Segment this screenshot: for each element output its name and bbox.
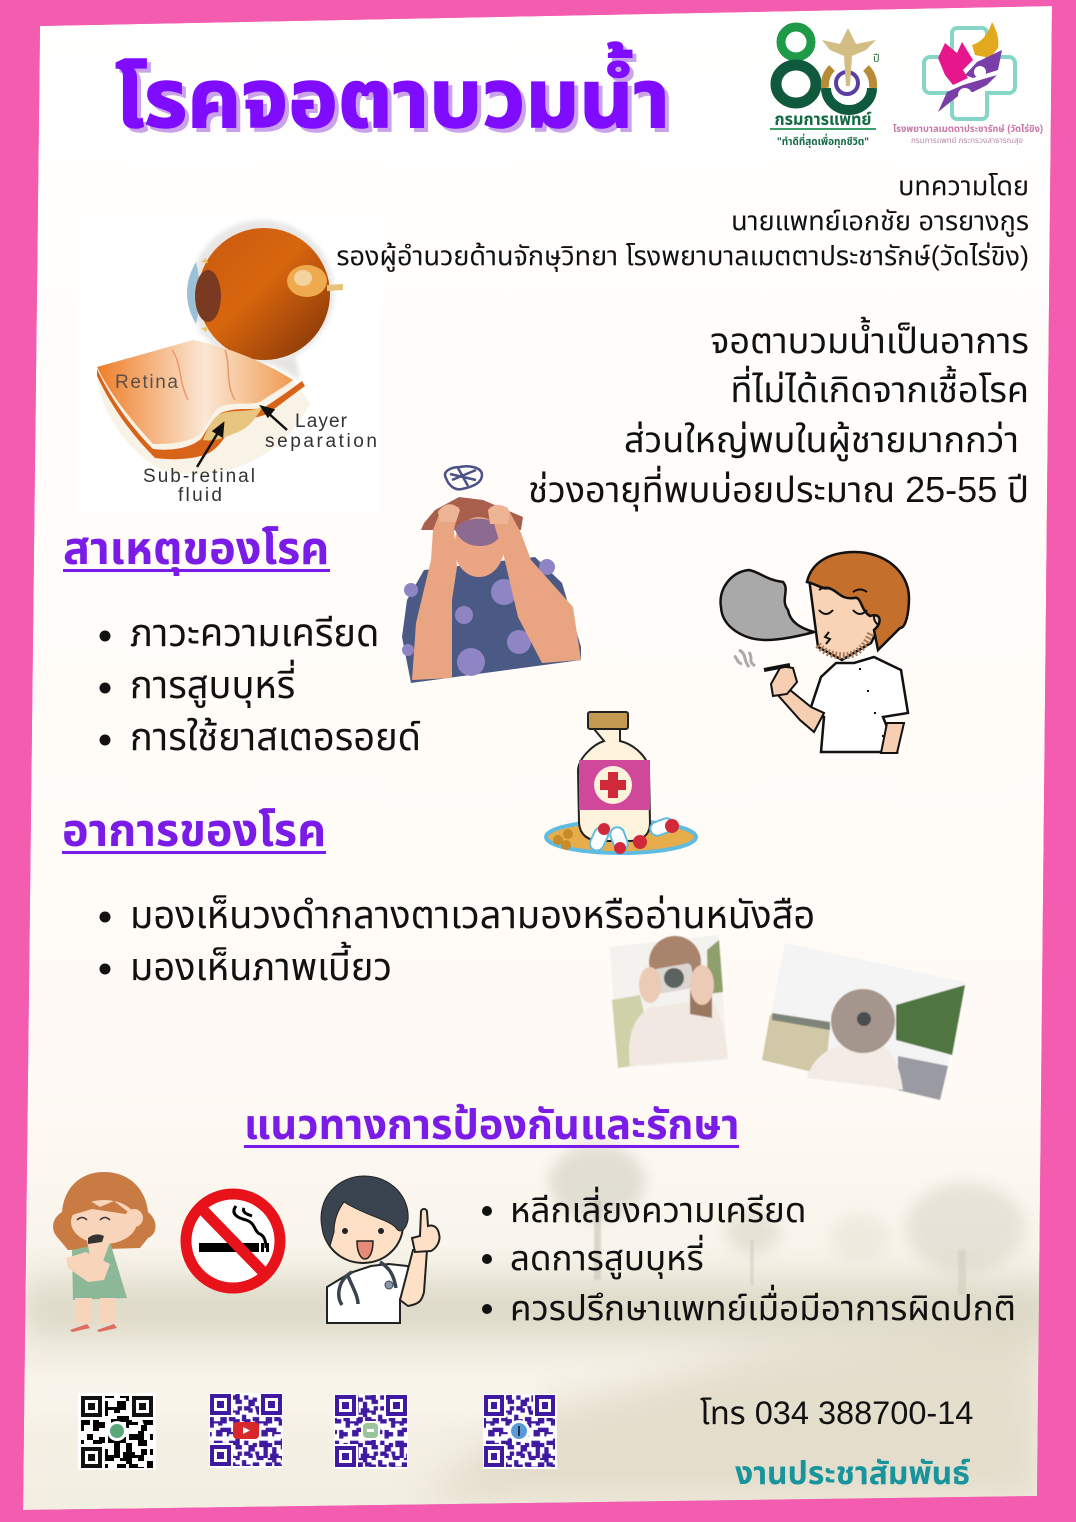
retina cross-section bbox=[97, 340, 310, 474]
QR code: YouTube bbox=[209, 1393, 283, 1468]
heading: prevention and treatment: แนวทางการป้องกันและรักษา bbox=[244, 1101, 739, 1148]
diagram labels: fluid bbox=[178, 485, 222, 506]
illustration: girl coughing bbox=[53, 1172, 155, 1332]
misty landscape background bbox=[20, 1144, 1060, 1500]
list: causes: ภาวะความเครียด bbox=[130, 613, 379, 655]
eye diagram image bbox=[77, 215, 379, 512]
list: causes: การใช้ยาสเตอรอยด์ bbox=[130, 717, 421, 759]
list: symptoms: มองเห็นวงดำกลางตาเวลามองหรืออ่านหนังสือ bbox=[130, 895, 815, 937]
diagram labels: Sub-retinal bbox=[143, 466, 255, 487]
eyeball bbox=[187, 220, 343, 380]
author credit: นายแพทย์เอกชัย อารยางกูร bbox=[731, 206, 1029, 237]
public relations credit: งานประชาสัมพันธ์ bbox=[735, 1455, 971, 1491]
list: symptoms: มองเห็นภาพเบี้ยว bbox=[130, 941, 392, 989]
list: prevention: ควรปรึกษาแพทย์เมื่อมีอาการผิดปกติ bbox=[510, 1284, 1016, 1328]
list: prevention: ลดการสูบบุหรี่ bbox=[510, 1234, 704, 1279]
icon: no smoking sign bbox=[186, 1194, 280, 1288]
list: causes bbox=[100, 613, 421, 759]
diagram labels: Retina bbox=[115, 372, 178, 393]
diagram labels: separation bbox=[265, 431, 377, 452]
phone number: โทร 034 388700-14 bbox=[700, 1395, 973, 1431]
author credit: บทความโดย bbox=[898, 171, 1029, 201]
digit zero with emblem bbox=[826, 88, 872, 110]
illustration: medicine bottle with pills bbox=[546, 712, 696, 854]
intro paragraph: ช่วงอายุที่พบบ่อยประมาณ 25-55 ปี bbox=[528, 465, 1029, 511]
photo: distorted vision with dark spot bbox=[762, 943, 965, 1100]
title: โรคจอตาบวมน้ำ bbox=[115, 41, 670, 145]
intro paragraph: จอตาบวมน้ำเป็นอาการ bbox=[710, 316, 1029, 361]
title: โรคจอตาบวมน้ำ bbox=[119, 45, 674, 149]
illustration: stressed person bbox=[402, 466, 581, 683]
intro paragraph: ส่วนใหญ่พบในผู้ชายมากกว่า bbox=[624, 419, 1019, 461]
intro paragraph bbox=[528, 316, 1029, 511]
logo: Metta Pracharak hospital bbox=[893, 22, 1043, 145]
logo: Department of Medical Services 80 years: กรมการแพทย์ bbox=[774, 110, 872, 129]
photo: normal vision bbox=[610, 935, 728, 1068]
logo: Department of Medical Services 80 years bbox=[770, 27, 880, 148]
heading: symptoms: อาการของโรค bbox=[62, 805, 326, 856]
list: prevention bbox=[482, 1186, 1016, 1328]
digit eight bbox=[781, 27, 811, 57]
author credit bbox=[336, 171, 1029, 272]
logo: Metta Pracharak hospital: โรงพยาบาลเมตตาประชารักษ์ (วัดไร่ขิง) bbox=[893, 122, 1043, 135]
diagram labels: Layer bbox=[295, 411, 348, 432]
QR code: Facebook bbox=[483, 1394, 557, 1469]
logo: Department of Medical Services 80 years: ปี bbox=[873, 53, 880, 65]
arrows bbox=[197, 407, 287, 467]
QR code: website bbox=[78, 1393, 156, 1470]
list: symptoms bbox=[100, 895, 815, 989]
list: causes: การสูบบุหรี่ bbox=[130, 659, 295, 708]
intro paragraph: ที่ไม่ได้เกิดจากเชื้อโรค bbox=[730, 365, 1029, 410]
logo: Metta Pracharak hospital: กรมการแพทย์ กระทรวงสาธารณสุข bbox=[911, 136, 1023, 145]
illustration: man smoking bbox=[721, 552, 909, 753]
list: prevention: หลีกเลี่ยงความเครียด bbox=[510, 1186, 806, 1230]
heading: causes: สาเหตุของโรค bbox=[63, 523, 329, 576]
illustration: doctor pointing up bbox=[321, 1176, 440, 1323]
diagram labels bbox=[115, 372, 377, 506]
QR code: LINE bbox=[334, 1394, 408, 1469]
logo: Department of Medical Services 80 years: "ทำดีที่สุดเพื่อทุกชีวิต" bbox=[777, 133, 869, 148]
author credit: รองผู้อำนวยด้านจักษุวิทยา โรงพยาบาลเมตตาประชารักษ์(วัดไร่ขิง) bbox=[336, 241, 1029, 272]
